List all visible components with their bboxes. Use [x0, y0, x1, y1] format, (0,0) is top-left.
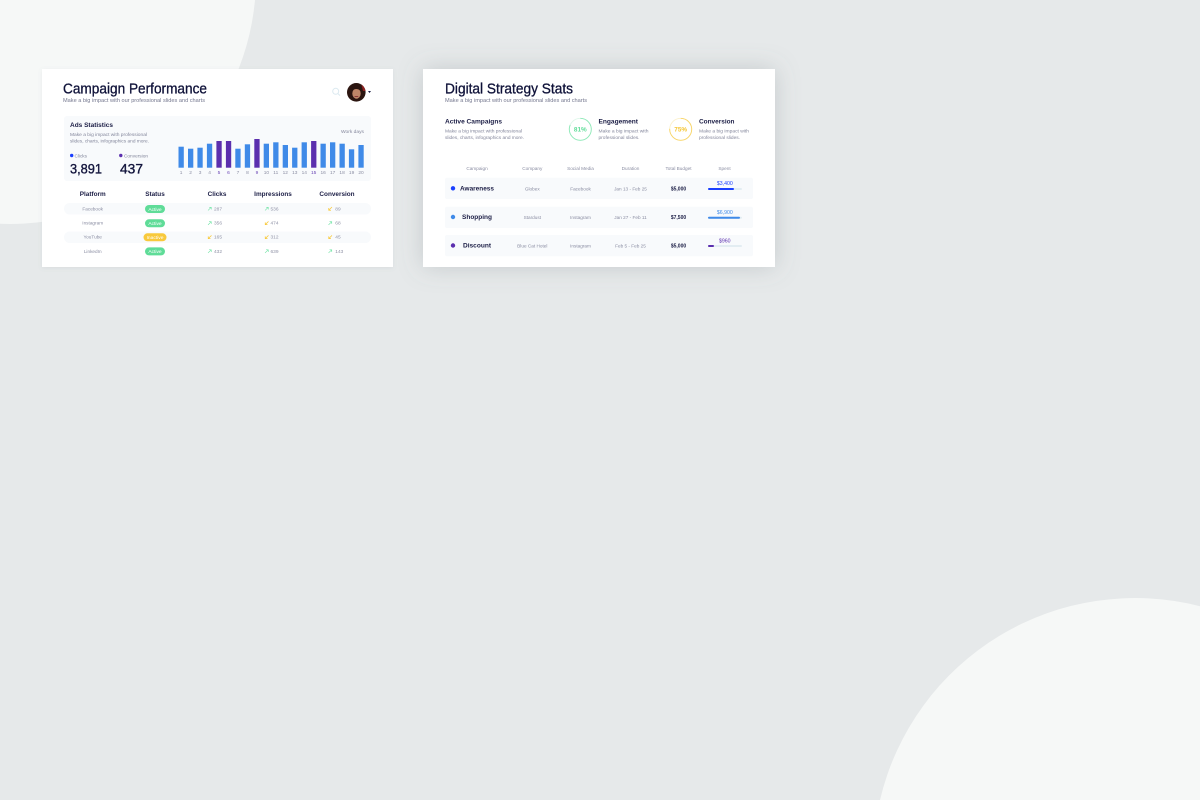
subtitle: Make a big impact with our professional slides and charts [63, 98, 205, 104]
stat: conversion [699, 118, 749, 141]
table header: Clicks [208, 191, 227, 198]
gauge: 81%: 81% [574, 126, 587, 134]
status pills [144, 205, 166, 255]
row: Shopping: Jan 27 - Feb 11 [614, 215, 647, 220]
bar chart: 2 [189, 170, 192, 176]
stat: conversion: Conversion [699, 118, 735, 125]
platform names: Instagram [82, 221, 103, 226]
stat: clicks: 3,891 [70, 162, 102, 176]
panel: Campaign Performance [42, 69, 393, 267]
row: Awareness: Facebook [570, 186, 591, 191]
stat: engagement [598, 118, 649, 141]
heading: Ads Statistics [70, 122, 113, 129]
table header: Duration [622, 166, 640, 171]
bar chart: 20 [358, 170, 364, 176]
decorative circle: bottom right [880, 598, 1200, 800]
title: Digital Strategy Stats [445, 82, 573, 98]
impressions column: 639 [270, 249, 279, 255]
bar chart: 5 [218, 170, 221, 176]
clicks column: 165 [214, 235, 222, 241]
gauge: 81% [569, 118, 591, 140]
bar chart: 19 [349, 170, 355, 176]
stat: engagement: professional slides. [598, 135, 640, 141]
bar chart: 7 [237, 170, 240, 176]
row: Awareness: Jan 13 - Feb 25 [614, 186, 647, 191]
conversion column [329, 206, 344, 255]
impressions column: 474 [270, 221, 279, 227]
bar chart: 13 [292, 170, 298, 176]
title: Campaign Performance [63, 82, 207, 98]
status pills: Active [148, 207, 162, 213]
text block: Make a big impact with professional [70, 132, 147, 138]
stat: active campaigns: Make a big impact with professional [445, 128, 522, 134]
icon: dropdown caret [368, 91, 371, 93]
bar chart: 17 [330, 170, 336, 176]
bar chart: 10 [264, 170, 269, 176]
bar chart: 11 [273, 170, 279, 176]
bar chart: 6 [227, 170, 230, 176]
table header [80, 191, 355, 198]
status pills: Inactive [147, 235, 164, 241]
icon: avatar [347, 83, 366, 102]
row: Shopping: Instagram [570, 215, 591, 220]
stat: clicks: Clicks [74, 153, 88, 159]
conversion column: 143 [335, 249, 344, 255]
clicks column: 432 [214, 249, 222, 255]
impressions column: 536 [270, 206, 279, 212]
clicks column: 287 [214, 206, 222, 212]
table header: Campaign [466, 166, 488, 171]
text block [70, 132, 149, 144]
table header: Spent [718, 166, 731, 171]
gauge: 75% [670, 118, 692, 140]
table header: Social Media [567, 166, 594, 171]
table: platforms [64, 191, 371, 255]
row: Awareness [445, 178, 753, 199]
row: Awareness: Globex [525, 186, 540, 191]
row: Discount: $960 [719, 238, 731, 244]
row: Awareness: $3,400 [717, 181, 733, 187]
row: Discount: $5,000 [671, 244, 686, 250]
platform names: LinkedIn [84, 249, 102, 254]
subtitle: Make a big impact with our professional slides and charts [445, 98, 587, 104]
row: Shopping: Stardust [524, 215, 542, 220]
conversion column: 89 [335, 206, 341, 212]
stat: conversion: 437 [120, 162, 143, 176]
bar chart: 16 [321, 170, 326, 176]
status pills: Active [148, 249, 162, 255]
platform names [82, 206, 104, 254]
row: Awareness: $5,000 [671, 186, 686, 192]
platform names: YouTube [83, 235, 102, 240]
stat: engagement: Make a big impact with [598, 128, 649, 134]
bar chart: 15 [311, 170, 317, 176]
bar chart: 14 [302, 170, 307, 176]
row: Shopping: $7,500 [671, 215, 686, 221]
impressions column [265, 206, 279, 255]
stat: engagement: Engagement [598, 118, 639, 125]
gauge: 75%: 75% [674, 126, 687, 134]
panel: Ads Statistics [64, 116, 371, 181]
bar chart: 9 [256, 170, 259, 176]
stat: active campaigns [445, 118, 524, 141]
label: work days: Work days [341, 129, 365, 135]
impressions column: 312 [270, 235, 279, 241]
bar chart: 1 [180, 170, 183, 176]
clicks column [208, 206, 222, 255]
row: Shopping: Shopping [462, 214, 492, 221]
stat: conversion: Conversion [124, 153, 148, 159]
bar chart: 4 [208, 170, 211, 176]
decorative circle: top left [0, 0, 255, 224]
row: Discount: Discount [463, 242, 492, 250]
bar chart: 8 [246, 170, 249, 176]
table header [466, 166, 731, 171]
row: Shopping [445, 207, 753, 228]
bar chart: 12 [283, 170, 288, 176]
row: Discount: Instagram [570, 244, 591, 248]
table header: Conversion [319, 191, 355, 198]
table header: Total Budget [665, 166, 692, 171]
clicks column: 356 [214, 221, 222, 227]
stat: conversion: professional slides. [699, 135, 740, 141]
row: Shopping: $6,900 [717, 210, 733, 216]
status pills: Active [148, 221, 162, 227]
stat: active campaigns: slides, charts, infographics and more. [445, 135, 524, 141]
row: Discount: Feb 5 - Feb 25 [615, 244, 646, 248]
panel: Digital Strategy Stats [423, 69, 775, 267]
conversion column: 45 [335, 235, 341, 241]
conversion column: 68 [335, 221, 341, 227]
bar chart: 3 [199, 170, 202, 176]
bar chart [178, 139, 364, 176]
table header: Platform [80, 191, 106, 198]
stat: clicks [70, 153, 102, 176]
table header: Status [145, 191, 165, 198]
text block: slides, charts, infographics and more. [70, 138, 149, 144]
row: Discount: Blue Cat Hotel [517, 244, 547, 248]
platform names: Facebook [82, 206, 104, 211]
row: Discount [445, 235, 753, 256]
stat: conversion: Make a big impact with [699, 128, 749, 134]
table header: Impressions [254, 191, 292, 198]
icon: search [333, 88, 340, 96]
stat: active campaigns: Active Campaigns [445, 118, 502, 125]
stat: conversion [119, 153, 148, 176]
bar chart: 18 [339, 170, 345, 176]
table header: Company [522, 166, 543, 171]
row: Awareness: Awareness [460, 186, 494, 192]
